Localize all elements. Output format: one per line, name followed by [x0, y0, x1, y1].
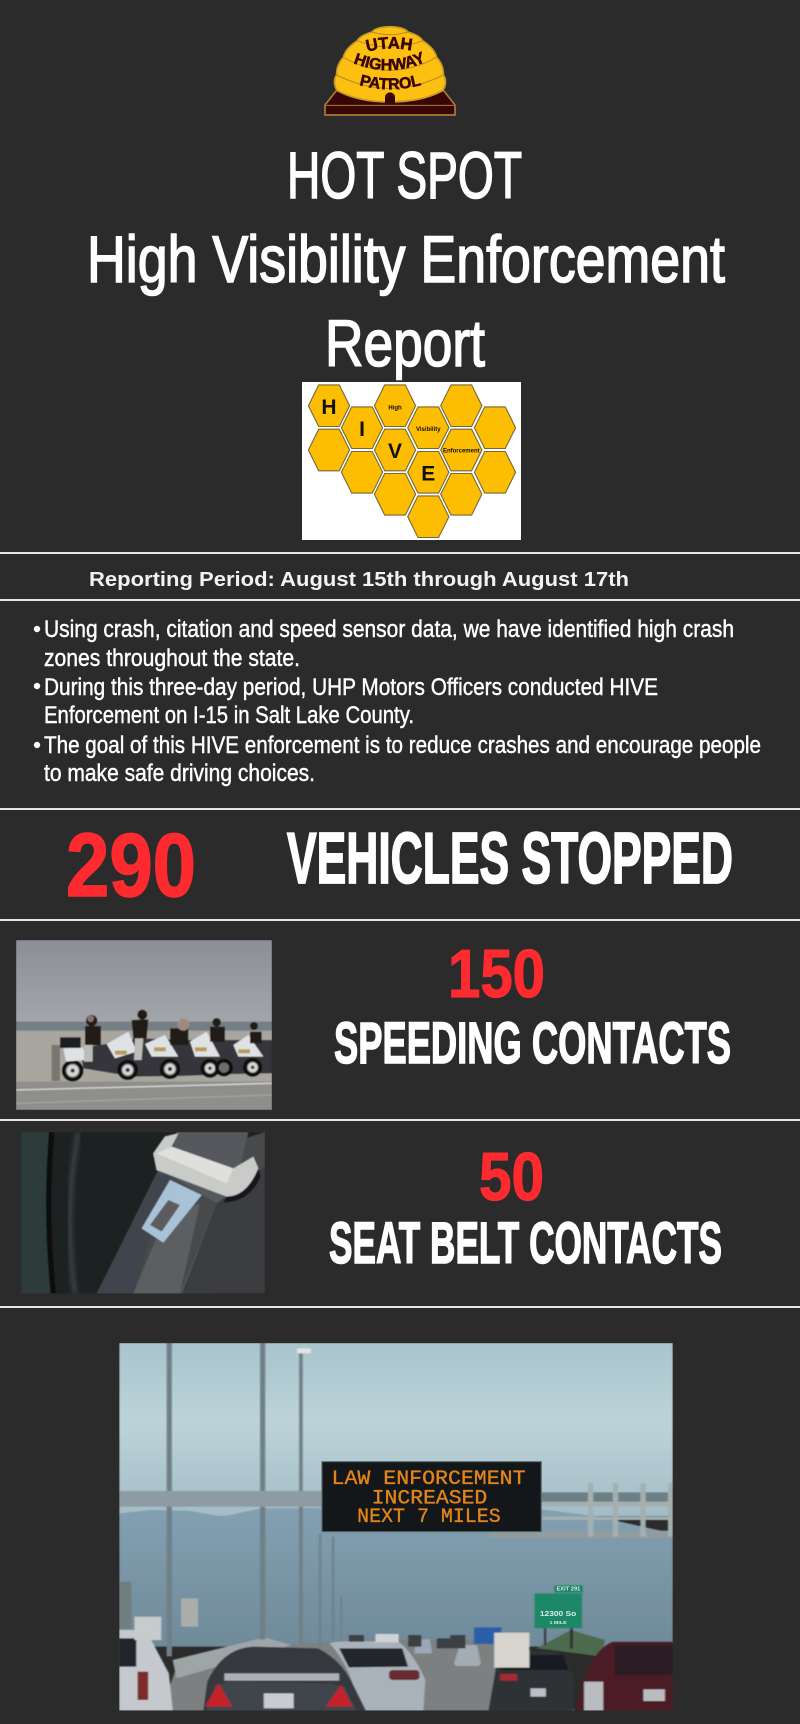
- logo: Utah Highway Patrol beehive: UTAH: [366, 36, 412, 51]
- logo: Utah Highway Patrol beehive: PATROL: [360, 74, 422, 90]
- stat: seat belt contacts: [329, 1139, 722, 1276]
- variable message sign: [322, 1462, 541, 1532]
- photo: motor officers: [16, 940, 272, 1110]
- HIVE honeycomb graphic: High: [388, 406, 402, 412]
- gantry: [119, 1491, 324, 1507]
- cars: [119, 1617, 673, 1711]
- riders: [85, 1010, 262, 1045]
- stat: vehicles stopped: 290: [66, 816, 196, 916]
- divider lines: [0, 552, 800, 1308]
- motorcycle bodies: [80, 1038, 272, 1077]
- HIVE honeycomb graphic: [302, 382, 521, 540]
- stat: seat belt contacts: 50: [479, 1139, 544, 1215]
- reporting period: Reporting Period: August 15th through August 17th: [89, 569, 629, 591]
- title: [87, 138, 725, 380]
- title: Report: [325, 306, 485, 380]
- logo: Utah Highway Patrol beehive: [324, 26, 456, 116]
- HIVE honeycomb graphic: V: [388, 440, 402, 463]
- exit sign text: 12300 So: [540, 1609, 576, 1618]
- logo: Utah Highway Patrol beehive: HIGHWAY: [354, 51, 422, 70]
- bullet list: During this three-day period, UHP Motors Officers conducted HIVE: [44, 674, 658, 701]
- variable message sign: INCREASED: [372, 1488, 487, 1510]
- exit sign text: EXIT 291: [556, 1587, 580, 1593]
- roadside signs: [181, 1598, 198, 1627]
- HIVE honeycomb graphic: Enforcement: [443, 448, 480, 454]
- stat: speeding contacts: [334, 936, 731, 1076]
- exit sign text: [540, 1587, 580, 1626]
- bullet list: [34, 616, 761, 787]
- HIVE honeycomb graphic: H: [321, 396, 337, 419]
- variable message sign: NEXT 7 MILES: [357, 1506, 501, 1528]
- poles: [167, 1343, 342, 1656]
- HIVE honeycomb graphic: Visibility: [416, 427, 441, 433]
- variable message sign: LAW ENFORCEMENT: [332, 1468, 526, 1491]
- bullet list: zones throughout the state.: [44, 645, 300, 672]
- photo: seat belt buckle: [21, 1132, 265, 1294]
- bullet list: Enforcement on I-15 in Salt Lake County.: [44, 702, 414, 729]
- stat: speeding contacts: 150: [448, 936, 545, 1012]
- photo: highway message sign: [119, 1343, 673, 1711]
- stat: vehicles stopped: [66, 816, 733, 916]
- HIVE honeycomb graphic: E: [421, 462, 435, 486]
- exit sign text: 1 MILE: [549, 1620, 567, 1626]
- title: HOT SPOT: [287, 138, 522, 212]
- bullet list: to make safe driving choices.: [44, 760, 315, 787]
- HIVE honeycomb graphic: I: [359, 418, 365, 441]
